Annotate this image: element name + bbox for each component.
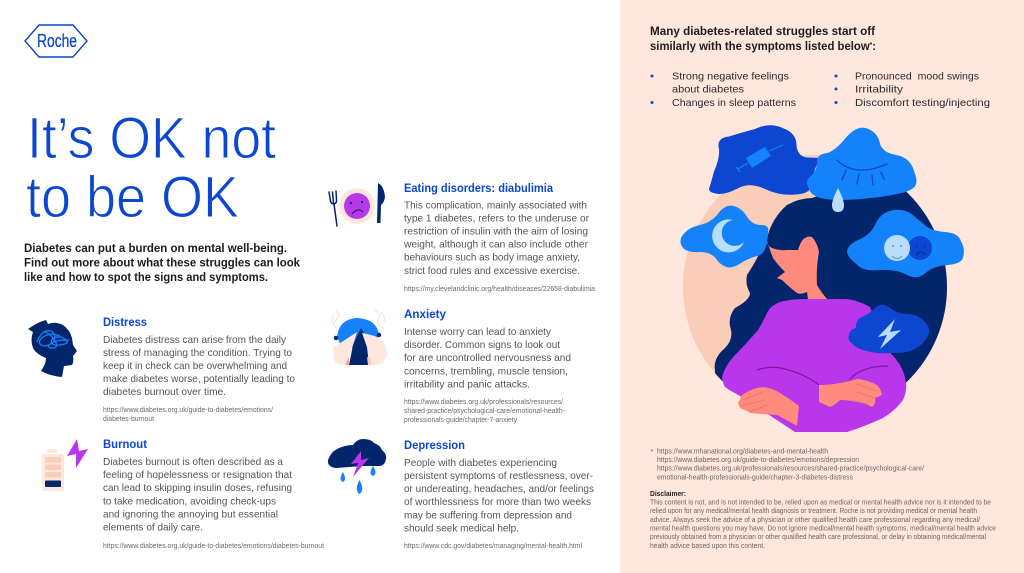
icon: storm cloud [328,439,386,494]
section: depression: People with diabetes experiencing [404,457,557,469]
intro text: Diabetes can put a burden on mental well-being. [24,241,287,255]
section: burnout [103,439,324,550]
section: depression: of worthlessness for more than two weeks [404,496,591,508]
cloud: faces [847,210,964,277]
section: anxiety: professionals-guide/chapter-7-anxiety [404,417,517,424]
intro text [24,241,300,284]
title: to be OK [26,165,239,230]
disclaimer: mental health questions you may have. Do not ignore medical/mental health symptoms, medical/mental health advice [650,526,996,532]
footnote references: emotional-health-professionals-guide/chapter-3-diabetes-distress [657,474,853,481]
face and neck [765,235,827,299]
section: distress: diabetes-burnout [103,416,154,423]
section: anxiety: disorder. Common signs to look out [404,339,560,351]
section: distress: diabetes burnout over time. [103,386,226,398]
symptoms heading [650,24,876,53]
section: distress: Diabetes distress can arise from the daily [103,334,287,346]
section: anxiety: concerns, trembling, muscle tension, [404,366,568,378]
footnote references [650,448,924,481]
section: eating disorders: https://my.clevelandclinic.org/health/diseases/22658-diabulimia [404,286,595,293]
title: It’s OK not [27,106,276,171]
section: anxiety: irritability and panic attacks. [404,378,530,390]
section: depression [404,440,594,550]
icon: distress head [28,320,77,377]
disclaimer: previously obtained from a physician or other qualified health care professional, or delay in obtaining medical/mental [650,534,986,541]
symptoms list: Strong negative feelings [672,70,789,82]
section: burnout: https://www.diabetes.org.uk/guide-to-diabetes/emotions/diabetes-burnout [103,543,324,550]
title [26,106,276,230]
section: distress: stress of managing the condition. Trying to [103,347,292,359]
section: burnout: feeling of hopelessness or resignation that [103,469,292,481]
icon: anxiety head in hands [331,310,387,365]
sweater folds [757,366,888,385]
illustration: woman with thought clouds [680,125,964,440]
symptoms heading: * [870,42,872,49]
icon: battery and bolt [42,439,88,491]
symptoms heading: : [872,39,876,53]
section: distress: keep it in check can be overwhelming and [103,360,287,372]
section: distress: Distress [103,317,147,329]
peach circle and hair [683,155,947,396]
disclaimer: relied upon for any medical/mental health diagnosis or treatment. Roche is not providing medical or mental health [650,508,977,515]
footnote references: * [650,449,654,456]
section: anxiety: for are uncontrolled nervousness and [404,352,571,364]
section: depression: or undereating, headaches, and/or feelings [404,483,594,495]
cloud: crying eye [807,128,916,212]
section: anxiety: Anxiety [404,309,447,321]
section: eating disorders [403,183,595,293]
section: depression: should seek medical help. [404,522,519,534]
logo: Roche: Roche [37,31,77,51]
section: depression: persistent symptoms of restlessness, over- [404,470,593,482]
section: anxiety: Intense worry can lead to anxiety [404,326,552,338]
section: eating disorders: type 1 diabetes, refers to the underuse or [404,212,589,224]
logo: Roche [25,25,87,57]
symptoms heading: similarly with the symptoms listed below [650,39,883,53]
section: distress [103,317,295,423]
section: burnout: to take medication, avoiding check-ups [103,496,276,508]
disclaimer: Disclaimer: [650,491,686,498]
section: eating disorders: weight, although it can also include other [403,239,588,251]
section: eating disorders: Eating disorders: diabulimia [404,183,554,195]
intro text: Find out more about what these struggles can look [24,256,300,270]
section: eating disorders: restriction of insulin with the aim of losing [404,226,588,238]
disclaimer: This content is not, and is not intended to be, relied upon as medical or mental health advice nor is it intended to be [650,500,991,506]
section: anxiety: https://www.diabetes.org.uk/professionals/resources/ [404,399,563,406]
symptoms list [650,70,990,109]
section: anxiety: shared-practice/psychological-care/emotional-health- [404,408,566,415]
section: burnout: and ignoring the annoying but essential [103,508,278,520]
section: eating disorders: strict food rules and excessive exercise. [404,265,580,277]
section: depression: may be suffering from depression and [404,510,572,522]
symptoms list: Changes in sleep patterns [672,97,796,109]
section: burnout: Burnout [103,439,147,451]
section: burnout: Diabetes burnout is often described as a [103,456,283,468]
section: burnout: can lead to skipping insulin doses, refusing [103,482,292,494]
sweater [722,299,906,432]
footnote references: https://www.diabetes.org.uk/professionals/resources/shared-practice/psychological-care/ [657,466,924,473]
symptoms list: Pronounced mood swings [855,70,979,82]
footnote references: https://www.mhanational.org/diabetes-and-mental-health [657,448,828,455]
symptoms list: Irritability [855,84,904,96]
section: distress: make diabetes worse, potentially leading to [103,373,295,385]
section: eating disorders: behaviours such as body image anxiety, [404,252,580,264]
footnote references: https://www.diabetes.org.uk/guide-to-diabetes/emotions/depression [657,457,859,464]
section: depression: https://www.cdc.gov/diabetes/managing/mental-health.html [404,543,582,550]
section: anxiety [404,309,571,424]
arms [738,387,799,426]
symptoms list: Discomfort testing/injecting [855,97,990,109]
icon: plate with fork and knife [329,183,385,226]
disclaimer: health advice based upon this content. [650,543,765,550]
disclaimer: advice. Always seek the advice of a physician or other qualified health care professional regarding any medical/ [650,517,980,524]
section: burnout: elements of daily care. [103,522,203,534]
cloud: lightning [848,305,929,353]
cloud: syringe [709,125,820,195]
symptoms heading: Many diabetes-related struggles start off [650,24,876,38]
section: distress: https://www.diabetes.org.uk/guide-to-diabetes/emotions/ [103,407,273,414]
disclaimer [650,491,996,550]
intro text: like and how to spot the signs and symptoms. [24,270,268,284]
section: depression: Depression [404,440,465,452]
cloud: moon [680,206,768,267]
section: eating disorders: This complication, mainly associated with [404,199,587,211]
panel: right background [620,0,1024,573]
symptoms list: about diabetes [672,84,744,96]
